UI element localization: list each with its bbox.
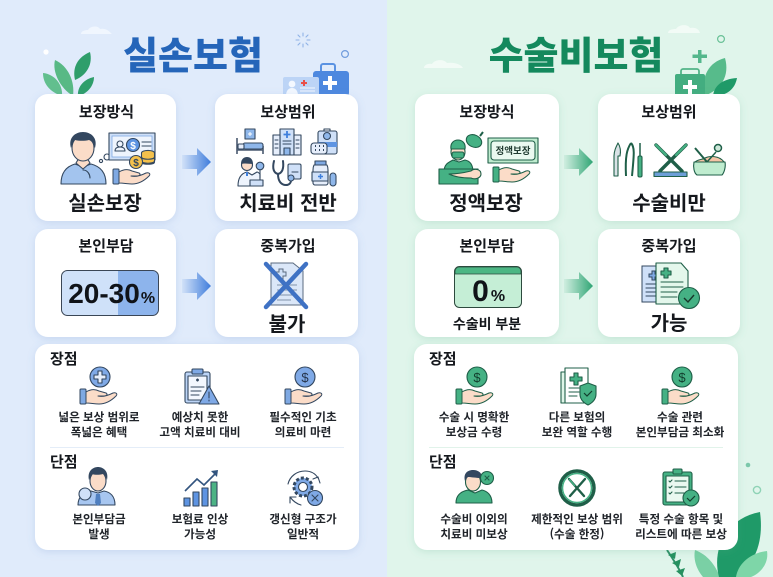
item: 특정 수술 항목 및 — [635, 469, 727, 542]
panel: 보장방식 right — [415, 94, 559, 221]
item: 제한적인 보상 범위 — [531, 471, 623, 542]
icon: hospital — [273, 129, 301, 155]
panel: 본인부담 left — [35, 229, 176, 337]
icon: surgeon and fixed-sum bill — [439, 132, 538, 184]
item: 필수적인 기초: 필수적인 기초 — [269, 409, 337, 425]
heading: 장점: 장점 — [50, 348, 78, 369]
item: 수술 시 명확한: 수술 시 명확한 — [439, 409, 510, 425]
panel: 보장방식 left — [35, 94, 176, 221]
item: 갱신형 구조가: 일반적 — [287, 526, 319, 542]
item: 수술 시 명확한: 보상금 수령 — [446, 424, 502, 440]
item: 수술비 이외의: 수술비 이외의 — [440, 511, 508, 527]
value: 가능 — [651, 307, 687, 336]
icon: crossed document — [266, 263, 306, 307]
arrow: left row 2 — [182, 272, 211, 300]
item: 수술 시 명확한: $ — [473, 370, 481, 385]
heading: 단점: 단점 — [50, 451, 78, 472]
value: 불가 — [269, 308, 305, 337]
arrow: right row 1 — [564, 148, 593, 176]
icon: documents with check — [642, 263, 700, 308]
decoration: dots and ring — [746, 463, 761, 494]
icon: person with bill, coins and hand: $ — [133, 158, 139, 169]
icon: doctor — [238, 157, 264, 186]
item: 특정 수술 항목 및: 리스트에 따른 보상 — [635, 526, 727, 542]
value: 수술비만 — [632, 187, 706, 216]
decoration: bottom-right leaves — [667, 512, 767, 577]
item: 수술 관련 — [636, 367, 725, 440]
heading: 보상범위 — [641, 101, 697, 122]
decoration: left cloud — [81, 26, 112, 34]
icon: medical kit and card — [283, 64, 349, 96]
item: 넓은 보상 범위로 — [58, 367, 140, 440]
heading: 중복가입 — [260, 235, 316, 256]
heading: 보장방식 — [79, 101, 134, 122]
chart: 20-30% gauge: 20-30 — [68, 278, 140, 309]
item: 제한적인 보상 범위: 제한적인 보상 범위 — [531, 511, 623, 527]
item: 다른 보험의: 보완 역할 수행 — [542, 424, 612, 440]
item: 수술 관련: 본인부담금 최소화 — [636, 424, 725, 440]
item: 다른 보험의 — [542, 368, 612, 440]
heading: 단점: 단점 — [429, 451, 457, 472]
item: 수술비 이외의 — [440, 470, 508, 542]
item: 다른 보험의: 다른 보험의 — [549, 409, 605, 425]
item: 넓은 보상 범위로: 넓은 보상 범위로 — [58, 409, 140, 425]
arrow: right row 2 — [564, 272, 593, 300]
item: 넓은 보상 범위로: 폭넓은 혜택 — [71, 424, 127, 440]
item: 수술비 이외의: 치료비 미보상 — [440, 526, 508, 542]
item: 수술 관련: 수술 관련 — [657, 409, 703, 425]
item: 예상치 못한: 고액 치료비 대비 — [159, 424, 241, 440]
item: 갱신형 구조가 — [269, 471, 337, 542]
heading: 보장방식 — [459, 101, 515, 122]
title: 수술비보험: 수술비보험 — [489, 25, 663, 80]
item: 필수적인 기초: 의료비 마련 — [275, 424, 331, 440]
value: 정액보장 — [449, 187, 523, 216]
panel: right background — [387, 0, 773, 577]
panel: 본인부담 right — [415, 229, 559, 337]
decoration: ring — [342, 51, 348, 57]
item: 본인부담금 발생 — [72, 467, 126, 542]
item: 갱신형 구조가: 갱신형 구조가 — [269, 511, 337, 527]
icon: surgeon and fixed-sum bill: 정액보장 — [496, 143, 531, 157]
item: 보험료 인상: 가능성 — [184, 526, 216, 542]
item: 수술 관련: $ — [678, 370, 686, 385]
icon: person with bill, coins and hand — [61, 132, 155, 184]
item: 필수적인 기초: $ — [301, 370, 309, 385]
item: 필수적인 기초 — [269, 367, 337, 440]
heading: 보상범위 — [260, 101, 316, 122]
panel: right pros and cons — [414, 344, 738, 550]
arrow: left row 1 — [182, 148, 211, 176]
icon: surgical tools — [614, 143, 725, 177]
panel: 보상범위 right — [598, 94, 740, 221]
chart: 20-30% gauge: % — [141, 290, 155, 307]
value: 수술비 부분 — [453, 314, 521, 334]
panel: 중복가입 left — [215, 229, 358, 337]
item: 제한적인 보상 범위: (수술 한정) — [550, 526, 604, 542]
chart: 0% box: 0 — [472, 275, 489, 308]
decoration: plus — [692, 50, 707, 63]
icon: first aid kit and pills — [311, 129, 337, 154]
value: 치료비 전반 — [239, 187, 337, 216]
icon: bed — [237, 129, 263, 154]
item: 보험료 인상: 보험료 인상 — [172, 511, 229, 527]
icon: stethoscope — [273, 161, 301, 185]
chart: 0% box — [454, 266, 522, 308]
panel: left background — [0, 0, 387, 577]
decoration: ring — [718, 36, 724, 42]
decoration: right top cloud — [668, 25, 700, 33]
icon: medicine bottle and capsule — [312, 161, 336, 186]
heading: 중복가입 — [641, 235, 697, 256]
chart: 20-30% gauge — [62, 270, 158, 316]
panel: 중복가입 right — [598, 229, 740, 337]
divider — [50, 446, 344, 448]
heading: 본인부담 — [459, 235, 515, 256]
item: 본인부담금 발생: 본인부담금 — [72, 511, 126, 527]
icon: person with bill, coins and hand: $ — [130, 141, 136, 152]
icon: kit and leaves — [675, 58, 737, 96]
item: 보험료 인상 — [172, 470, 229, 542]
decoration: sparkle — [296, 33, 310, 47]
decoration: right left cloud — [424, 60, 463, 68]
panel: 보상범위 left — [215, 94, 358, 221]
item: 수술 시 명확한 — [439, 367, 510, 440]
divider — [429, 446, 723, 448]
value: 실손보장 — [68, 187, 142, 216]
item: 특정 수술 항목 및: 특정 수술 항목 및 — [639, 511, 723, 527]
item: 예상치 못한: 예상치 못한 — [172, 409, 229, 425]
chart: 0% box: % — [491, 288, 505, 305]
decoration: left plant — [43, 49, 94, 96]
heading: 본인부담 — [78, 235, 134, 256]
item: 예상치 못한 — [159, 369, 241, 440]
heading: 장점: 장점 — [429, 348, 457, 369]
title: 실손보험: 실손보험 — [123, 25, 263, 80]
panel: left pros and cons — [35, 344, 359, 550]
item: 본인부담금 발생: 발생 — [88, 526, 110, 542]
